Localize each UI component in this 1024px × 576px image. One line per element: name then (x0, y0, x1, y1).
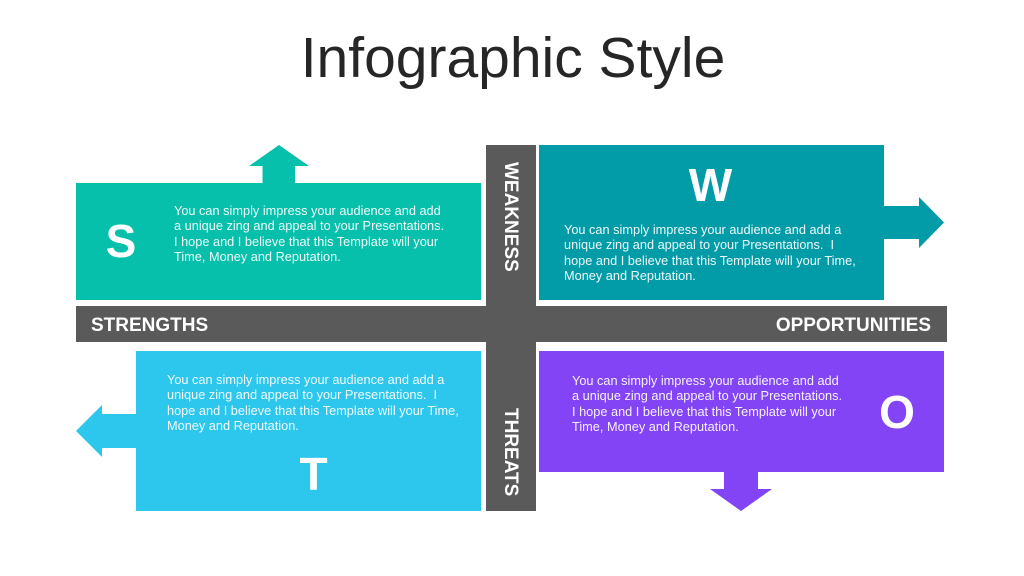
panel: opportunities (539, 351, 944, 472)
horizontal bar (76, 306, 947, 342)
arrow: down (710, 472, 772, 511)
letter O: O (879, 386, 915, 438)
opportunities text (572, 373, 842, 434)
strengths text: a unique zing and appeal to your Presentations. (174, 218, 444, 233)
weakness text: You can simply impress your audience and add a (564, 222, 841, 237)
strengths text: Time, Money and Reputation. (174, 249, 341, 264)
label: threats: THREATS (500, 408, 521, 496)
panel: weakness (539, 145, 884, 300)
threats text: hope and I believe that this Template will your Time, (167, 403, 459, 418)
letter W: W (689, 159, 732, 211)
arrow: left (76, 405, 136, 457)
opportunities text: Time, Money and Reputation. (572, 419, 739, 434)
arrow: right (884, 197, 944, 248)
weakness text (564, 222, 856, 283)
opportunities text: You can simply impress your audience and add (572, 373, 839, 388)
strengths text: I hope and I believe that this Template will your (174, 234, 438, 249)
strengths text: You can simply impress your audience and add (174, 203, 441, 218)
panel: threats (136, 351, 481, 511)
threats text: You can simply impress your audience and add a (167, 372, 444, 387)
strengths text (174, 203, 444, 264)
threats text: Money and Reputation. (167, 418, 299, 433)
opportunities text: I hope and I believe that this Template will your (572, 404, 836, 419)
arrow: up (249, 145, 309, 183)
label: strengths: STRENGTHS (91, 315, 208, 336)
weakness text: hope and I believe that this Template will your Time, (564, 253, 856, 268)
weakness text: unique zing and appeal to your Presentations. I (564, 237, 834, 252)
title: Infographic Style (301, 26, 725, 90)
letter T: T (299, 448, 328, 500)
vertical bar (486, 145, 536, 511)
label: opportunities: OPPORTUNITIES (776, 315, 931, 336)
opportunities text: a unique zing and appeal to your Presentations. (572, 388, 842, 403)
threats text: unique zing and appeal to your Presentations. I (167, 387, 437, 402)
threats text (167, 372, 459, 433)
letter S: S (106, 215, 136, 267)
label: weakness: WEAKNESS (500, 162, 521, 272)
weakness text: Money and Reputation. (564, 268, 696, 283)
panel: strengths (76, 183, 481, 300)
